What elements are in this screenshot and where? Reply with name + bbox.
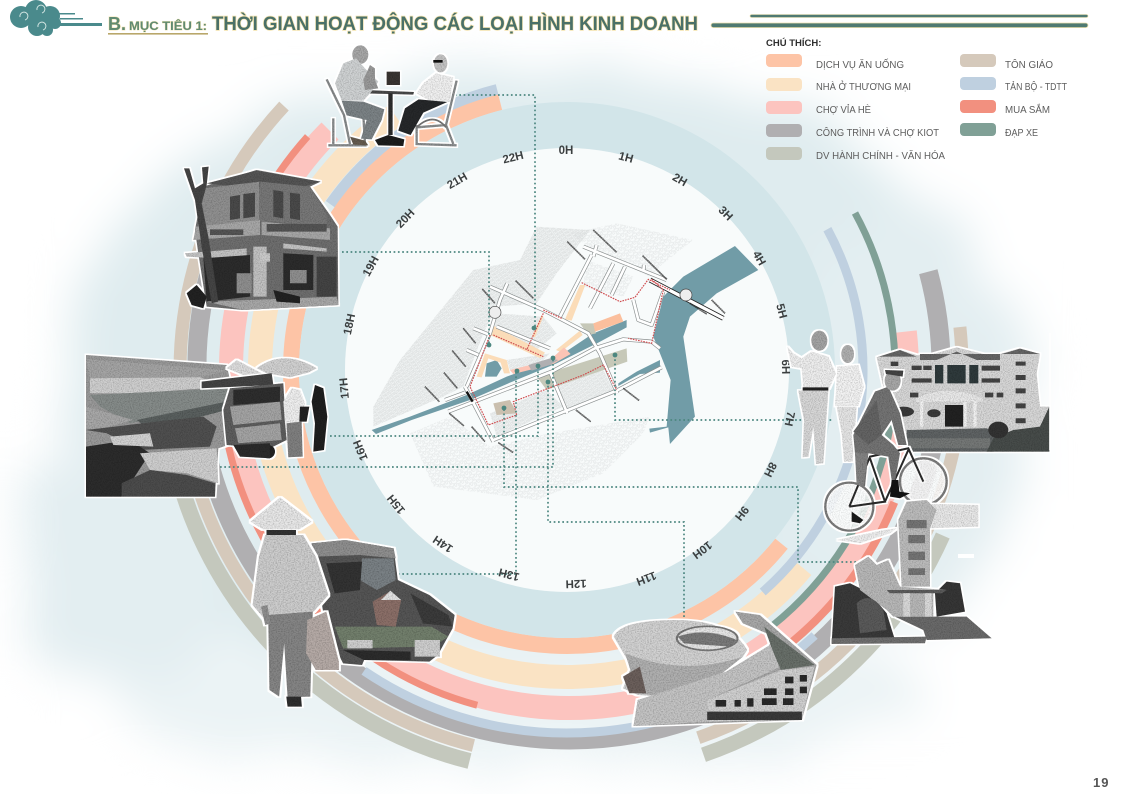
hour labels: 7H	[782, 410, 796, 427]
functional zones	[477, 285, 627, 415]
hour labels: 4H	[750, 249, 767, 268]
clock ring	[322, 125, 812, 615]
arc: salmon shopping bottom	[225, 430, 477, 705]
hour labels: 0H	[559, 145, 573, 157]
hour labels: 2H	[670, 172, 689, 189]
surrounding building fabric	[373, 223, 693, 500]
road casing	[445, 245, 667, 442]
arc: pink street market	[231, 131, 907, 708]
hour labels: 22H	[502, 150, 525, 166]
heading prefix: B.	[108, 14, 126, 34]
arc: peach food service	[291, 102, 782, 646]
arc: salmon shopping right	[784, 502, 894, 648]
legend: food service: DỊCH VỤ ĂN UỐNG	[816, 57, 904, 71]
arc: blue walking upper left	[330, 90, 497, 204]
legend: commercial housing	[766, 78, 911, 93]
legend: walking sports: TẢN BỘ - TDTT	[1005, 80, 1067, 93]
arc: salmon shopping top	[251, 136, 308, 222]
header line lower	[711, 23, 1088, 28]
legend: cycling	[960, 123, 1038, 139]
legend	[766, 37, 1067, 162]
legend: administrative culture: DV HÀNH CHÍNH - VĂN HÓA	[816, 149, 945, 162]
hour labels: 10H	[690, 538, 714, 561]
main heading: THỜI GIAN HOẠT ĐỘNG CÁC LOẠI HÌNH KINH DOANH	[212, 11, 698, 35]
canal	[372, 320, 660, 434]
arc: blue walking right	[763, 229, 863, 592]
heading label: MỤC TIÊU 1:	[129, 20, 207, 33]
photo: old market roofs	[86, 355, 243, 497]
hour labels: 20H	[394, 207, 417, 231]
hour labels: 8H	[761, 460, 778, 479]
hour labels: 1H	[617, 150, 634, 166]
photo: cyclist	[825, 370, 947, 531]
lake	[485, 360, 502, 377]
icon: cloud ornament	[10, 0, 102, 36]
legend: walking sports	[960, 77, 1067, 93]
arc: outer blue walking	[364, 636, 815, 733]
hour labels: 19H	[361, 254, 382, 279]
legend title: CHÚ THÍCH:	[766, 37, 821, 49]
inner circle	[345, 148, 789, 592]
cycling and shopping routes	[470, 279, 670, 425]
hour labels: 18H	[342, 313, 358, 336]
photo: vendor market stall	[312, 540, 455, 665]
legend: religion: TÔN GIÁO	[1005, 58, 1053, 71]
legend: administrative culture	[766, 147, 945, 162]
hour labels: 14H	[431, 533, 455, 554]
hour labels: 5H	[773, 303, 789, 320]
photo: corner shophouse	[184, 167, 339, 310]
title header	[10, 0, 1088, 36]
arc: sage administrative right	[704, 536, 943, 755]
photo: street food cart and customers	[202, 358, 327, 458]
legend: street market	[766, 101, 871, 116]
arc: cream commercial housing	[260, 116, 802, 677]
legend: shopping	[960, 100, 1050, 116]
photo: couple at cafe table	[327, 45, 457, 146]
hour labels: 9H	[732, 503, 751, 522]
hour labels: 6H	[779, 359, 791, 374]
photo: opera stadium building	[614, 612, 817, 726]
schedule arcs	[170, 90, 962, 761]
hour labels: 13H	[497, 565, 521, 582]
arc: beige religion left	[180, 106, 473, 746]
hour labels: 16H	[352, 438, 371, 462]
connector lines with map markers	[220, 95, 856, 617]
bridge and roundabouts	[467, 280, 723, 402]
hour labels: 21H	[445, 171, 470, 192]
legend: commercial housing: NHÀ Ở THƯƠNG MẠI	[816, 80, 911, 93]
photo: pagoda tower building	[832, 500, 992, 644]
road fill	[445, 245, 667, 442]
arc: beige religion right	[698, 327, 962, 738]
legend: shopping: MUA SẮM	[1005, 103, 1050, 116]
site plan map	[372, 223, 758, 500]
hour labels: 17H	[338, 377, 352, 399]
heading underline	[108, 33, 208, 35]
photo: hotel administrative building	[877, 347, 1049, 452]
legend: food service	[766, 54, 904, 71]
legend: street market: CHỢ VỈA HÈ	[816, 103, 871, 116]
large river	[649, 246, 758, 444]
hour labels: 12H	[565, 577, 587, 589]
photo: woman in conical hat with basket	[251, 497, 339, 707]
hour labels: 11H	[634, 569, 658, 587]
hour labels: 3H	[716, 204, 735, 223]
arc: gray kiosks	[197, 241, 941, 740]
road name labels	[425, 230, 725, 453]
legend: religion	[960, 54, 1053, 71]
legend: works and kiosks	[766, 124, 939, 139]
legend: works and kiosks: CÔNG TRÌNH VÀ CHỢ KIOT	[816, 126, 939, 139]
arc: green cycling	[772, 213, 895, 626]
arc: sage administrative left	[170, 440, 470, 761]
page number: 19	[1093, 775, 1109, 790]
legend: cycling: ĐẠP XE	[1005, 128, 1038, 139]
hour labels	[338, 145, 796, 589]
photo: walking elderly couple	[787, 331, 864, 464]
hour labels: 15H	[385, 492, 408, 516]
white edge line of hotel photo	[1049, 333, 1051, 450]
small white smudge	[958, 554, 974, 558]
header line upper	[750, 14, 1088, 18]
